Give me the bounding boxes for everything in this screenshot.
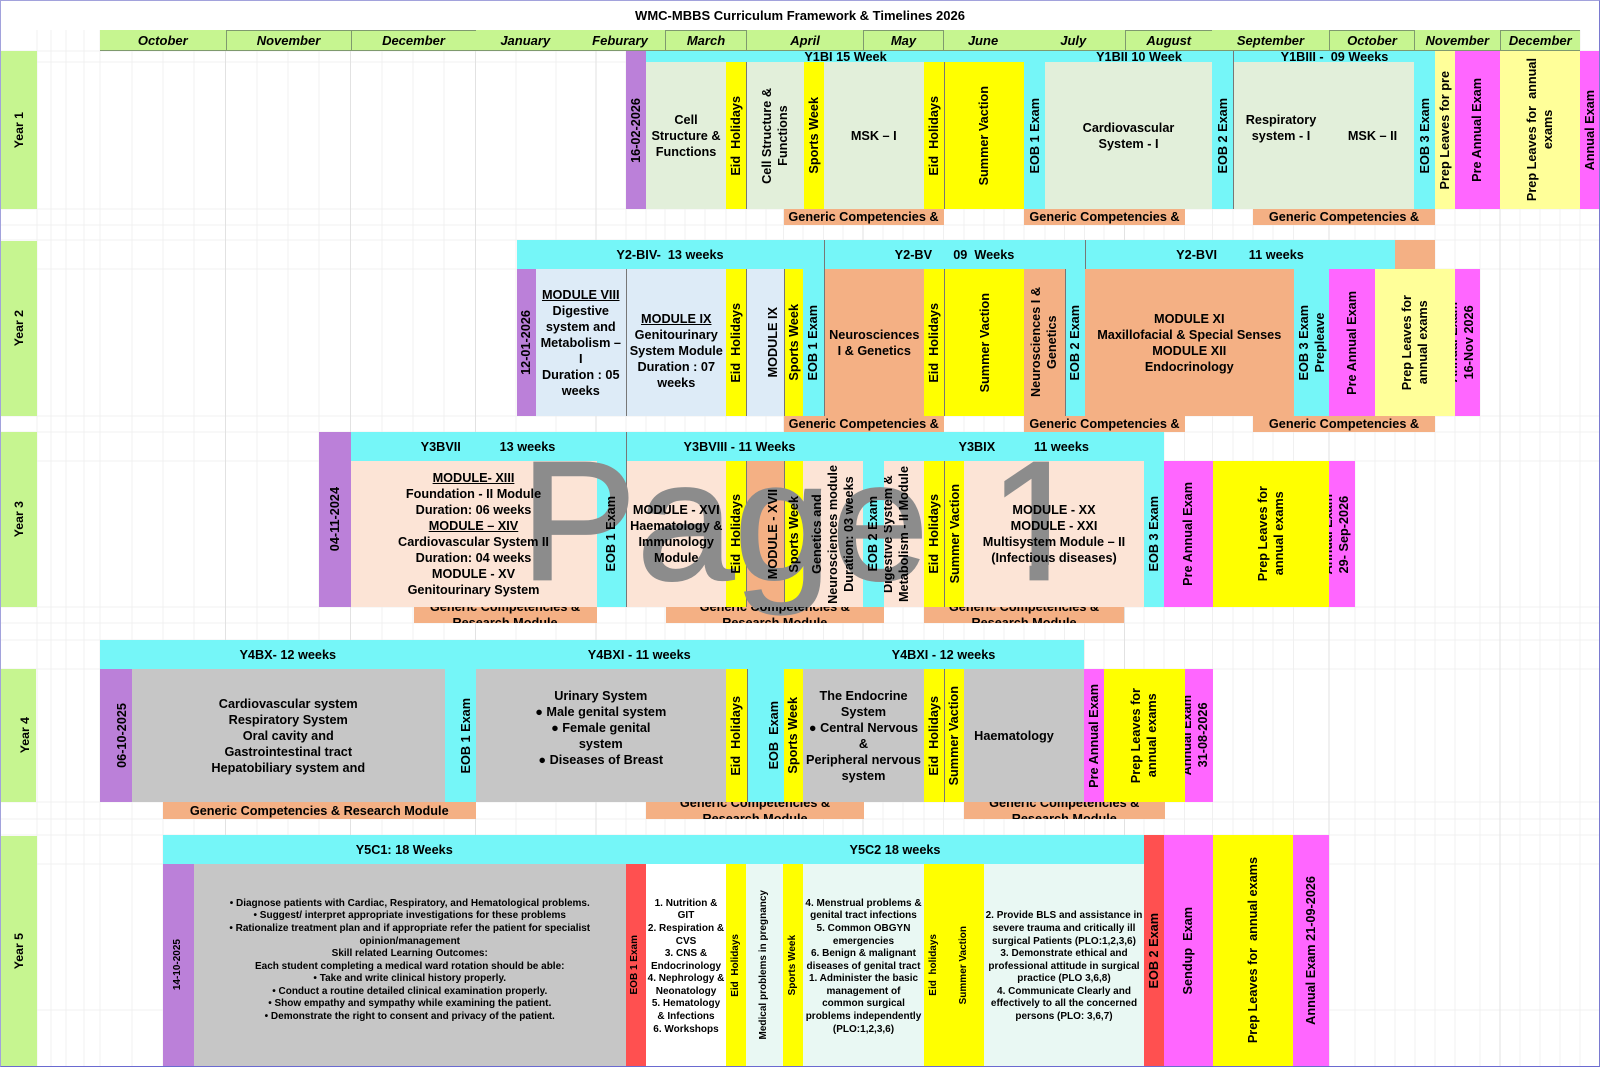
module IX: MODULE IX Genitourinary System Module Duration : 07 weeks <box>630 312 723 390</box>
annual exam <box>1454 269 1480 416</box>
prep leaves for annual <box>1500 51 1580 209</box>
module: cell structure continued <box>746 62 804 209</box>
summer vacation <box>944 461 964 607</box>
block header Y4BXI <box>476 640 803 669</box>
pre annual exam: Pre Annual Exam <box>1345 291 1359 394</box>
pre annual exam <box>1084 669 1104 802</box>
month: October: October <box>138 32 188 48</box>
pediatrics topics list <box>646 864 726 1066</box>
eid holidays <box>924 864 944 1066</box>
sports week: Sports Week <box>806 97 820 174</box>
EOB 1 exam: EOB 1 Exam <box>629 935 640 995</box>
panel: year 1 <box>1 50 1599 225</box>
module neurosciences continued <box>1024 269 1064 416</box>
month: September: September <box>1237 32 1304 48</box>
month: June <box>943 30 1022 51</box>
module VIII <box>536 269 626 416</box>
month: July <box>1022 30 1124 51</box>
year label: Year 1 <box>12 112 26 148</box>
eid holidays: Eid Holidays <box>729 696 743 775</box>
month: March: March <box>687 33 725 48</box>
annual exam <box>1184 669 1212 802</box>
block header Y2-BVI: Y2-BVI 11 weeks <box>1176 248 1304 262</box>
eid holidays: Eid Holidays <box>729 96 743 175</box>
haematology <box>964 669 1084 802</box>
month: January: January <box>500 32 550 48</box>
month: December <box>350 30 476 51</box>
summer vacation: Summer Vaction <box>977 86 991 185</box>
month: November 2026: November <box>1425 32 1489 48</box>
module: MSK I <box>824 62 924 209</box>
generic competencies 1 <box>163 802 476 819</box>
prep leaves: Prep Leaves for annual exams <box>1256 486 1286 582</box>
month header row <box>100 30 1580 51</box>
start date: 04-11-2024 <box>328 487 342 552</box>
eid holidays: Eid Holidays <box>927 96 941 175</box>
module IX continued <box>746 269 784 416</box>
EOB 3 exam <box>1144 461 1164 607</box>
module XIII XIV XV: MODULE- XIII Foundation - II Module Duration: 06 weeks MODULE – XIV Cardiovascular System II Duration: 04 weeks MODULE - XV Genitourinary System <box>398 471 549 597</box>
month: August: August <box>1146 33 1191 48</box>
summer vacation: Summer Vaction <box>948 484 962 584</box>
month: July: July <box>1060 32 1086 48</box>
month: August <box>1124 30 1212 51</box>
month: September <box>1212 30 1329 51</box>
block header Y3BIX: Y3BIX 11 weeks <box>958 440 1089 454</box>
eid holidays: Eid Holidays <box>729 303 743 382</box>
block header Y2-BIV: Y2-BIV- 13 weeks <box>616 248 724 262</box>
prep leaves for pre annual <box>1435 51 1454 209</box>
medical problems in pregnancy <box>746 864 783 1066</box>
EOB 1 exam: EOB 1 Exam <box>604 496 618 572</box>
EOB 2 exam <box>1212 62 1233 209</box>
month: December 2026: December <box>1509 33 1572 48</box>
panel: year 2 <box>1 240 1480 432</box>
panel: year 3 <box>1 432 1355 623</box>
generic competencies 2 <box>646 802 864 819</box>
start date: 14-10-2025 <box>172 939 183 991</box>
month: November <box>226 30 350 51</box>
sports week <box>784 669 803 802</box>
medical problems in pregnancy: Medical problems in pregnancy <box>758 890 769 1040</box>
month: February: Feburary <box>592 32 648 48</box>
EOB 2 exam: EOB 2 Exam <box>1147 913 1161 988</box>
urinary genital list: Urinary System ● Male genital system ● Female genital system ● Diseases of Breast <box>535 688 666 766</box>
start date <box>626 51 646 209</box>
pre annual exam: Pre Annual Exam <box>1181 482 1195 586</box>
annual exam: Annual Exam 21-09-2026 <box>1304 876 1318 1025</box>
module: cardiovascular I: Cardiovascular System - I <box>1083 120 1174 150</box>
sports week: Sports Week <box>787 304 801 381</box>
eid holidays: Eid holidays <box>928 934 939 996</box>
year label <box>0 432 37 607</box>
EOB exam <box>746 669 784 802</box>
block header Y1BIII <box>1233 51 1435 62</box>
module XI and XII: MODULE XI Maxillofacial & Special Senses MODULE XII Endocrinology <box>1097 312 1281 374</box>
EOB 1 exam <box>1024 62 1045 209</box>
EOB 1 exam: EOB 1 Exam <box>459 698 473 773</box>
block header Y2-BIV <box>516 240 824 269</box>
endocrine nervous list <box>803 669 924 802</box>
module IX <box>626 269 726 416</box>
year label: Year 4 <box>18 717 32 754</box>
month: February <box>575 30 665 51</box>
prep leaves: Prep Leaves for annual exams <box>1129 688 1159 783</box>
generic competencies 1: Generic Competencies & <box>789 417 939 431</box>
eid holidays <box>924 269 944 416</box>
eid holidays <box>924 461 944 607</box>
watermark: page 1: Page <box>520 427 929 616</box>
EOB 2 exam: EOB 2 Exam <box>1216 98 1230 173</box>
generic competencies 2 <box>666 607 884 623</box>
month: April: April <box>790 32 820 48</box>
start date: 16-02-2026 <box>629 98 643 162</box>
pre annual exam <box>1164 461 1212 607</box>
panel: year 5 <box>1 835 1329 1066</box>
block header Y4BX: Y4BX- 12 weeks <box>239 648 336 662</box>
generic competencies 3: Generic Competencies & <box>1269 210 1419 224</box>
EOB 3 exam: EOB 3 Exam <box>1147 496 1161 572</box>
pre annual exam <box>1329 269 1375 416</box>
obgyn and surgical outcomes <box>803 864 924 1066</box>
year label <box>0 836 37 1066</box>
module: cardiovascular I <box>1045 62 1212 209</box>
summer vacation <box>944 269 1024 416</box>
prep leaves <box>1375 269 1454 416</box>
sports week: Sports Week <box>787 935 798 995</box>
block header Y3BVIII <box>626 432 852 461</box>
annual exam <box>1329 461 1355 607</box>
block header Y2-BVI <box>1084 240 1394 269</box>
module IX continued: MODULE IX <box>766 307 780 378</box>
EOB 2 exam <box>1064 269 1084 416</box>
eid holidays: Eid Holidays <box>927 494 941 574</box>
EOB 2 exam <box>863 461 884 607</box>
sports week <box>804 62 824 209</box>
module XVI: MODULE - XVI Haematology & Immunology Module <box>630 503 722 565</box>
module neurosciences continued: Neurosciences I & Genetics <box>1029 287 1059 398</box>
block header Y1BII: Y1BII 10 Week <box>1096 50 1182 64</box>
month: October <box>100 30 226 51</box>
sports week: Sports Week <box>786 697 800 774</box>
block header Y5C1: Y5C1: 18 Weeks <box>356 842 453 856</box>
summer vacation <box>944 62 1024 209</box>
eid holidays <box>924 62 944 209</box>
sports week <box>784 461 803 607</box>
sports week <box>784 269 803 416</box>
module: respiratory and MSK II: Respiratory system - I <box>1246 113 1316 143</box>
watermark: page 1: 1 <box>988 427 1086 616</box>
sendup exam: Sendup Exam <box>1181 907 1195 994</box>
module XVII: MODULE - XVII <box>766 489 780 579</box>
block header Y4BXI: Y4BXI - 11 weeks <box>588 648 691 662</box>
module XVI <box>626 461 726 607</box>
module XX XXI <box>964 461 1144 607</box>
year label: Year 5 <box>12 933 26 969</box>
block header Y1BI <box>646 51 1045 62</box>
summer vacation: Summer Vaction <box>947 686 961 785</box>
block header Y4BX <box>100 640 476 669</box>
eid holidays: Eid Holidays <box>927 303 941 382</box>
module XX XXI: MODULE - XX MODULE - XXI Multisystem Module – II (Infectious diseases) <box>983 503 1125 565</box>
eid holidays <box>924 669 944 802</box>
medical learning outcomes: • Diagnose patients with Cardiac, Respiratory, and Hematological problems. • Suggest/ interpret appropriate investigations for these problems • Rationalize treatment plan and if appropriate refer the patient for specialist opinion/management Skill related Learning Outcomes: Each student completing a medical ward rotation should be able: • Take and write clinical history properly. • Conduct a routine detailed clinical examination properly. • Show empathy and sympathy while examining the patient. • Demonstrate the right to consent and privacy of the patient. <box>229 898 590 1022</box>
EOB 2 exam: EOB 2 Exam <box>866 496 880 572</box>
EOB 1 exam: EOB 1 Exam <box>1028 98 1042 173</box>
prep leaves <box>1212 835 1293 1066</box>
module XI and XII <box>1084 269 1294 416</box>
EOB 3 exam <box>1414 62 1435 209</box>
prep leaves for annual: Prep Leaves for annual exams <box>1525 58 1555 202</box>
prep leaves for pre annual: Prep Leaves for pre <box>1438 71 1452 189</box>
month: May <box>863 30 943 51</box>
month: May: May <box>891 33 916 48</box>
pre annual exam: Pre Annual Exam <box>1087 684 1101 787</box>
eid holidays <box>726 62 746 209</box>
EOB 1 exam: EOB 1 Exam <box>806 305 820 380</box>
EOB 2 exam: EOB 2 Exam <box>1068 305 1082 380</box>
generic competencies 1: Generic Competencies & Research Module <box>190 804 449 818</box>
obgyn and surgical outcomes: 4. Menstrual problems & genital tract infections 5. Common OBGYN emergencies 6. Benign & malignant diseases of genital tract 1. Administer the basic management of common surgical problems independently (PLO:1,2,3,6) <box>805 898 922 1035</box>
start date: 12-01-2026 <box>519 310 533 375</box>
month: March <box>665 30 746 51</box>
month: April <box>746 30 863 51</box>
month: November 2026 <box>1414 30 1500 51</box>
module XVII <box>746 461 784 607</box>
eid holidays <box>726 461 746 607</box>
year label: Year 2 <box>12 310 26 347</box>
summer vacation: Summer Vaction <box>978 293 992 392</box>
module XIII XIV XV <box>350 461 596 607</box>
EOB 1 exam <box>596 461 626 607</box>
start date <box>100 669 132 802</box>
block header Y4BXI second <box>803 640 1084 669</box>
module: respiratory and MSK II: MSK – II <box>1348 129 1397 143</box>
block header Y1BIII: Y1BIII - 09 Weeks <box>1281 50 1388 64</box>
sports week: Sports Week <box>787 496 801 572</box>
eid holidays: Eid Holidays <box>729 494 743 574</box>
prep leaves <box>1104 669 1184 802</box>
month: June: June <box>968 32 998 48</box>
month: December 2026 <box>1500 30 1580 51</box>
sendup exam <box>1164 835 1212 1066</box>
eid holidays: Eid Holidays <box>927 696 941 775</box>
pediatrics topics list: 1. Nutrition & GIT 2. Respiration & CVS 3. CNS & Endocrinology 4. Nephrology & Neonatology 5. Hematology & Infections 6. Workshops <box>648 898 724 1035</box>
block header Y3BVII: Y3BVII 13 weeks <box>421 440 555 454</box>
endocrine nervous list: The Endocrine System ● Central Nervous & Peripheral nervous system <box>806 688 921 782</box>
generic competencies 1: Generic Competencies & <box>788 210 939 224</box>
EOB 2 exam <box>1144 835 1164 1066</box>
eid holidays: Eid Holidays <box>730 934 741 996</box>
block header Y2-BV: Y2-BV 09 Weeks <box>895 248 1014 262</box>
month: October 2026: October <box>1347 33 1397 48</box>
block header Y3BVIII: Y3BVIII - 11 Weeks <box>684 440 795 454</box>
block header Y2-BV <box>824 240 1084 269</box>
surgical outcomes: 2. Provide BLS and assistance in severe trauma and critically ill surgical Patients (PLO:1,2,3,6) 3. Demonstrate ethical and professional attitude in surgical practice (PLO 3,6,8) 4. Communicate Clearly and effectively to all the concerned persons (PLO: 3,6,7) <box>986 910 1142 1022</box>
eid holidays <box>726 269 746 416</box>
generic competencies 3: Generic Competencies & <box>1269 417 1419 431</box>
EOB 3 exam prepleave: EOB 3 Exam Prepleave <box>1296 305 1326 380</box>
EOB 1 exam <box>445 669 476 802</box>
EOB 3 exam prepleave <box>1294 269 1329 416</box>
block header Y5C2: Y5C2 18 weeks <box>850 842 940 856</box>
medical learning outcomes <box>194 864 626 1066</box>
start date: 06-10-2025 <box>115 703 129 768</box>
module: cell structure continued: Cell Structure & Functions <box>760 88 790 183</box>
eid holidays <box>726 669 746 802</box>
eid holidays <box>726 864 746 1066</box>
summer vacation: Summer Vaction <box>958 926 969 1004</box>
prep leaves: Prep Leaves for annual exams <box>1246 857 1260 1044</box>
module: MSK I: MSK – I <box>851 128 897 142</box>
year label: Year 3 <box>12 501 26 538</box>
generic competencies 2: Generic Competencies & <box>1029 417 1180 431</box>
annual exam <box>1293 835 1329 1066</box>
annual exam: Annual Exam <box>1583 90 1597 170</box>
block header Y3BIX <box>852 432 1164 461</box>
start date <box>516 269 536 416</box>
year label <box>0 51 37 209</box>
year label <box>0 669 36 802</box>
digestive system module <box>884 461 924 607</box>
month: January <box>476 30 575 51</box>
pre annual exam: Pre Annual Exam <box>1470 78 1484 182</box>
block header Y1BII <box>1045 51 1233 62</box>
block header Y3BVII <box>350 432 626 461</box>
generic competencies 2: Generic Competencies & <box>1029 210 1180 224</box>
annual exam <box>1580 51 1600 209</box>
summer vacation <box>944 864 984 1066</box>
orange header block <box>1394 240 1435 269</box>
module neurosciences: Neurosciences I & Genetics <box>829 328 919 358</box>
systems list: Cardiovascular system Respiratory System Oral cavity and Gastrointestinal tract Hepatobiliary system and <box>211 696 365 774</box>
block header Y5C2 <box>646 835 1144 864</box>
prep leaves <box>1212 461 1329 607</box>
summer vacation <box>944 669 964 802</box>
EOB 1 exam <box>626 864 646 1066</box>
month: October 2026 <box>1329 30 1414 51</box>
title: WMC-MBBS Curriculum Framework & Timelines 2026 <box>635 8 965 22</box>
sports week <box>783 864 803 1066</box>
panel: year 4 <box>1 640 1213 819</box>
module: cell structure <box>646 62 726 209</box>
start date <box>319 432 350 607</box>
EOB 3 exam: EOB 3 Exam <box>1418 98 1432 173</box>
haematology: Haematology <box>974 728 1054 742</box>
EOB 1 exam <box>803 269 824 416</box>
surgical outcomes <box>984 864 1144 1066</box>
pre annual exam <box>1454 51 1500 209</box>
prep leaves: Prep Leaves for annual exams <box>1400 295 1430 390</box>
start date <box>162 864 194 1066</box>
genetics and neurosciences module: Genetics and Neurosciences module Duration: 03 weeks <box>810 465 856 603</box>
block header Y4BXI second: Y4BXI - 12 weeks <box>892 648 995 662</box>
module neurosciences <box>824 269 924 416</box>
module: respiratory and MSK II <box>1233 62 1414 209</box>
block header Y5C1 <box>162 835 646 864</box>
module VIII: MODULE VIII Digestive system and Metabolism – I Duration : 05 weeks <box>541 288 621 398</box>
month: November: November <box>257 33 320 48</box>
month: December: December <box>382 33 445 48</box>
year label <box>0 241 37 416</box>
EOB exam: EOB Exam <box>766 701 780 770</box>
urinary genital list <box>476 669 726 802</box>
systems list <box>132 669 445 802</box>
module: cell structure: Cell Structure & Functions <box>651 112 721 158</box>
block header Y1BI: Y1BI 15 Week <box>804 50 887 64</box>
